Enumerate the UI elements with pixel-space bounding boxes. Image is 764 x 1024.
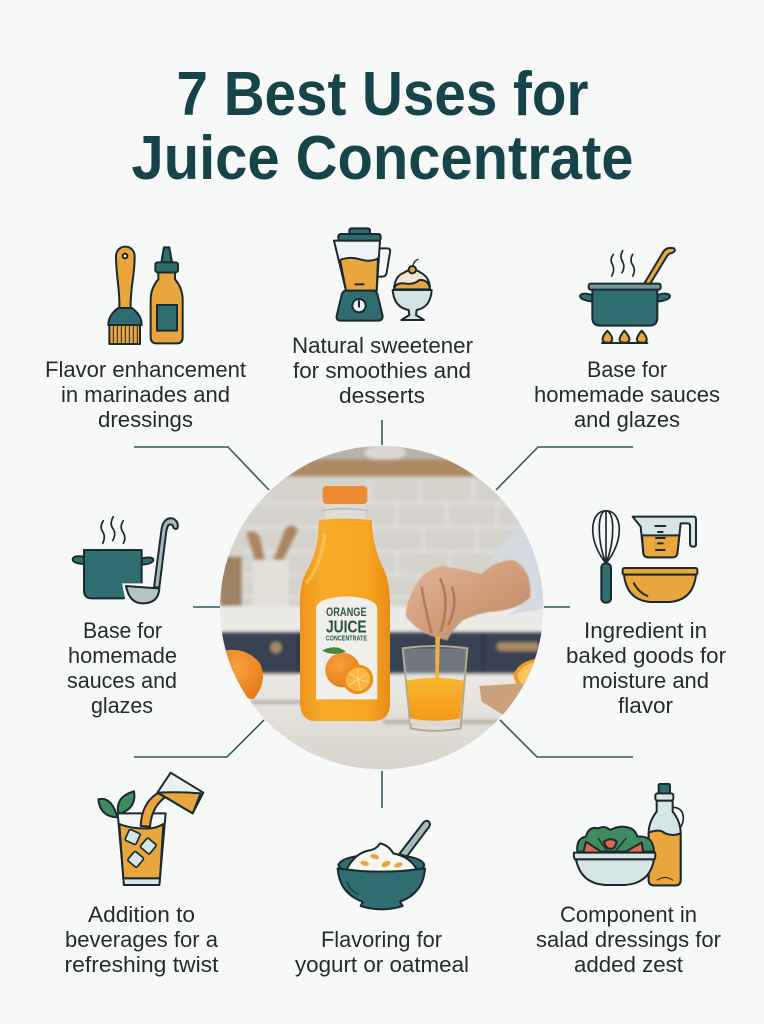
text: beverages — [64, 902, 219, 977]
text: base for sauces left: Base for — [83, 618, 162, 643]
text: yogurt or oatmeal — [295, 927, 469, 977]
text: beverages: beverages for a — [65, 927, 218, 952]
text: base for sauces top right — [534, 357, 720, 432]
panel: beverages — [64, 773, 219, 977]
label orange art — [322, 647, 374, 694]
text: flavor enhancement: dressings — [98, 407, 193, 432]
text: salad dressings: added zest — [574, 952, 684, 977]
text: base for sauces top right: and glazes — [574, 407, 680, 432]
text: baked goods: flavor — [618, 693, 673, 718]
text: base for sauces top right: homemade sauces — [534, 382, 720, 407]
text: base for sauces left: homemade — [68, 643, 177, 668]
orange fruit left — [226, 650, 263, 700]
orange fruit right — [513, 659, 535, 689]
title: 7 Best Uses for — [176, 60, 588, 129]
central photo: juice concentrate bottle and glass — [210, 440, 550, 781]
icon: basting brush and sauce bottle — [108, 247, 183, 344]
bottle — [325, 508, 365, 520]
text: base for sauces left: glazes — [91, 693, 153, 718]
text: flavor enhancement — [45, 357, 247, 432]
icon: yogurt bowl with spoon — [338, 821, 430, 909]
text: salad dressings: Component in — [560, 902, 697, 927]
connector lines — [134, 420, 633, 808]
text: baked goods: baked goods for — [566, 643, 726, 668]
text: yogurt or oatmeal: Flavoring for — [321, 927, 442, 952]
text: flavor enhancement: Flavor enhancement — [45, 357, 247, 382]
text: salad dressings: salad dressings for — [536, 927, 721, 952]
sleeve — [487, 525, 547, 615]
text: natural sweetener: desserts — [339, 383, 425, 408]
text: natural sweetener: Natural sweetener — [292, 333, 474, 358]
central photo: juice concentrate bottle and glass: ORANGE — [326, 605, 367, 619]
text: natural sweetener — [292, 333, 474, 408]
icon: pot with ladle — [73, 517, 178, 607]
panel: flavor enhancement — [45, 247, 247, 432]
panel: natural sweetener — [292, 228, 474, 408]
panel: yogurt or oatmeal — [295, 821, 469, 977]
text: beverages: refreshing twist — [64, 952, 219, 977]
icon: salad bowl and oil bottle — [574, 784, 683, 885]
kitchen background — [210, 440, 550, 781]
text: yogurt or oatmeal: yogurt or oatmeal — [295, 952, 469, 977]
title: Juice Concentrate — [132, 124, 634, 193]
cutting board — [479, 683, 524, 715]
text: natural sweetener: for smoothies and — [293, 358, 471, 383]
icon: pot on burner with spoon — [580, 248, 675, 343]
text: salad dressings — [536, 902, 721, 977]
icon: blender and sundae — [334, 228, 390, 321]
central photo: juice concentrate bottle and glass: JUICE — [326, 616, 367, 636]
bottle label — [316, 596, 377, 699]
icon: iced drink with pouring cup — [98, 773, 203, 885]
panel: salad dressings — [536, 784, 721, 977]
text: base for sauces top right: Base for — [587, 357, 667, 382]
text: baked goods: Ingredient in — [584, 618, 707, 643]
text: beverages: Addition to — [88, 902, 195, 927]
bottle cap — [323, 486, 367, 504]
glass with juice — [403, 637, 467, 731]
forearm and hand — [406, 561, 530, 641]
panel: base for sauces top right — [534, 248, 720, 432]
title — [132, 60, 634, 193]
central photo: juice concentrate bottle and glass: CONCENTRATE — [326, 635, 367, 642]
text: baked goods — [566, 618, 726, 718]
panel: baked goods — [566, 511, 726, 718]
text: base for sauces left — [67, 618, 177, 718]
text: base for sauces left: sauces and — [67, 668, 177, 693]
text: baked goods: moisture and — [582, 668, 709, 693]
panel: base for sauces left — [67, 517, 178, 718]
text: flavor enhancement: in marinades and — [61, 382, 230, 407]
icon: whisk, measuring cup and mixing bowl — [593, 511, 697, 603]
